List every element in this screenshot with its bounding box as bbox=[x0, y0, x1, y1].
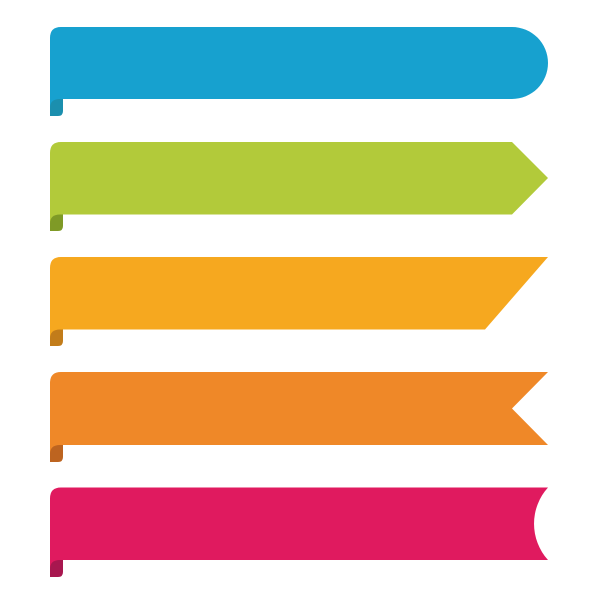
banner: blue bbox=[50, 27, 548, 108]
ribbon 2: green arrow end bbox=[50, 142, 548, 231]
fold: yellow bbox=[50, 330, 63, 346]
banner: yellow bbox=[50, 257, 548, 338]
ribbon 5: pink concave end bbox=[50, 488, 548, 577]
fold: pink bbox=[50, 560, 63, 577]
ribbon 4: orange swallowtail end bbox=[50, 372, 548, 462]
banner: pink bbox=[50, 488, 548, 569]
ribbon 1: blue rounded end bbox=[50, 27, 548, 116]
fold: orange bbox=[50, 445, 63, 462]
banner: orange bbox=[50, 372, 548, 454]
ribbon 3: yellow slanted end bbox=[50, 257, 548, 346]
banner: green bbox=[50, 142, 548, 224]
fold: blue bbox=[50, 99, 63, 116]
fold: green bbox=[50, 214, 63, 231]
